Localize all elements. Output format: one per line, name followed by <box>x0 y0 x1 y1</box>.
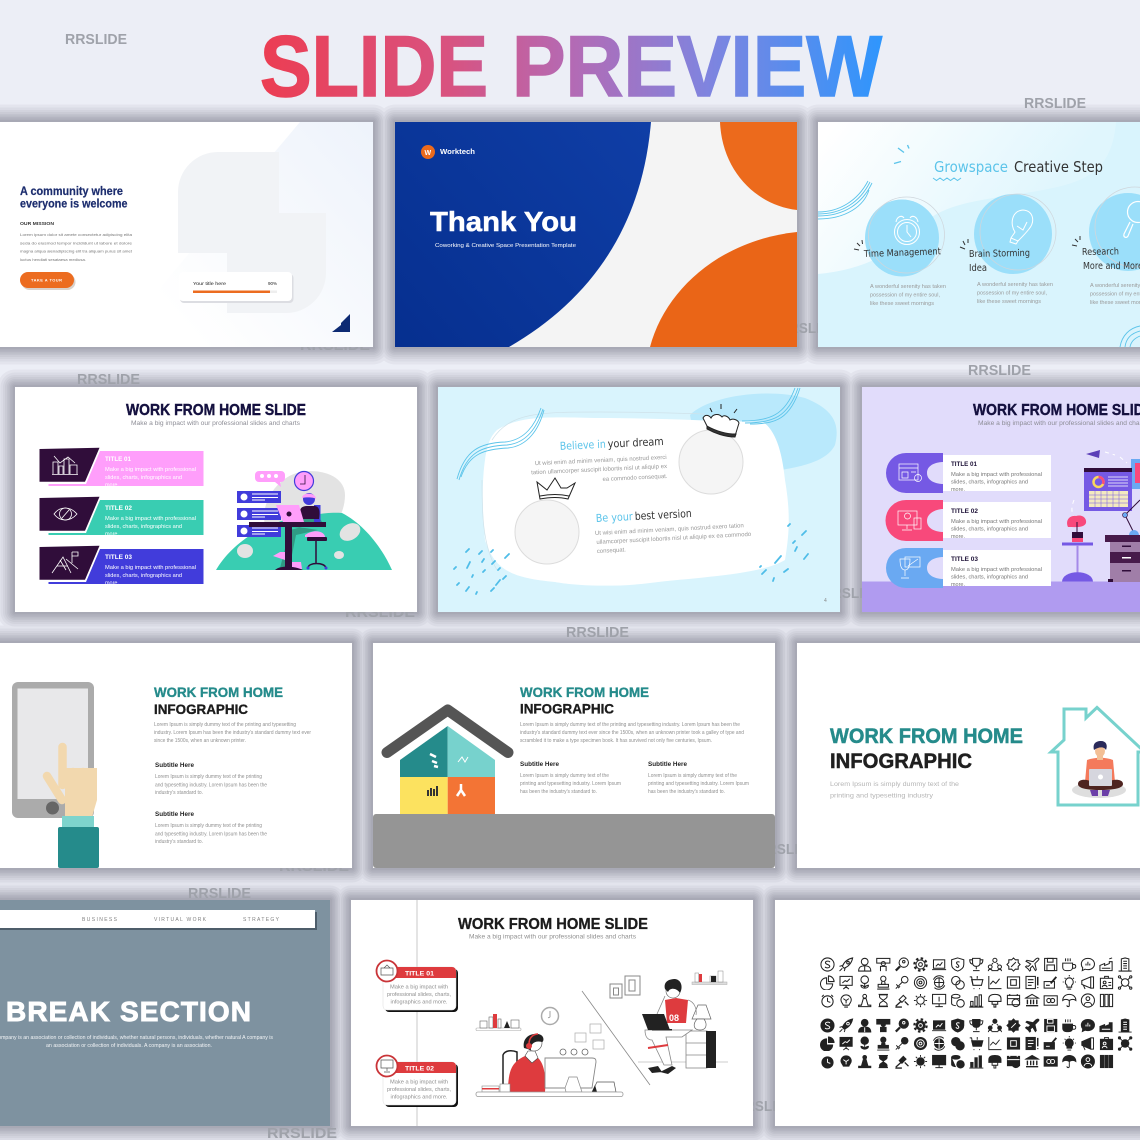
mission text: luctus hendiati sesataesa mediusa. <box>20 257 86 262</box>
watermarks: RRSLIDE <box>188 885 251 902</box>
heading: WORK FROM HOME SLIDE <box>458 916 648 933</box>
subtitle left <box>520 762 621 795</box>
crown 1 <box>703 404 739 437</box>
row 02: TITLE 02 <box>951 508 978 515</box>
subtitle block 1: industry's standard to. <box>155 790 203 796</box>
step 2: like these sweet mornings <box>977 299 1041 305</box>
thank you text: Coworking & Creative Space Presentation Template <box>435 243 576 249</box>
believe body: ea commodo consequat. <box>602 474 668 483</box>
row 01: slides, charts, infographics and <box>105 475 182 481</box>
step 1: Time Management <box>863 246 941 260</box>
row 03: Make a big impact with professional <box>951 567 1042 573</box>
card 1: infographics and more. <box>390 1000 448 1006</box>
title: PREVIEW <box>512 19 883 115</box>
subtext <box>830 781 959 800</box>
heading <box>20 186 128 210</box>
panel: tablet slide <box>0 643 352 868</box>
progress card <box>179 272 294 303</box>
row 03: TITLE 03 <box>951 556 978 563</box>
subtitle left: has been the industry's standard to. <box>520 789 597 795</box>
heading: INFOGRAPHIC <box>520 700 614 716</box>
subtitle block 2 <box>155 812 267 845</box>
mission text: magna aliqua aienadipiscing elit tra aliquam purus sit amet <box>20 248 133 254</box>
believe body: Ut wisi enim ad minim veniam, quis nostrud exerci <box>535 455 667 467</box>
card 2: Make a big impact with <box>390 1080 448 1086</box>
believe body <box>531 455 668 486</box>
crown 2 <box>537 478 575 499</box>
step 3: Research <box>1082 246 1119 258</box>
row 01: TITLE 01 <box>105 456 131 463</box>
page number: 4 <box>824 598 827 604</box>
heading <box>458 916 648 940</box>
subtitle block 2: Subtitle Here <box>155 812 195 818</box>
button <box>20 272 76 290</box>
heading <box>830 725 1023 773</box>
blue blob <box>690 393 837 474</box>
mission text: OUR MISSION <box>20 221 54 226</box>
subtitle block 1: Subtitle Here <box>155 763 195 769</box>
heading <box>520 684 649 716</box>
house with person icon <box>1051 708 1140 805</box>
row 01: Make a big impact with professional <box>951 472 1042 478</box>
nav bar: BUSINESS <box>82 917 118 923</box>
body text <box>0 1035 274 1049</box>
white blob <box>483 417 789 586</box>
heading: BREAK SECTION <box>6 996 251 1027</box>
watermarks: RRSLIDE <box>65 31 127 48</box>
row 03 <box>886 548 1051 588</box>
heading: WORK FROM HOME <box>520 684 649 700</box>
step 1: like these sweet mornings <box>870 301 934 307</box>
nav bar: VIRTUAL WORK <box>154 917 207 923</box>
subtitle block 1 <box>155 763 267 796</box>
row 03: slides, charts, infographics and <box>105 573 182 579</box>
heading: everyone is welcome <box>20 198 128 210</box>
believe text <box>559 435 664 453</box>
worktech logo <box>421 145 475 159</box>
title: SLIDE <box>260 19 488 115</box>
panel: believe slide <box>438 387 840 612</box>
divider line <box>582 991 650 1085</box>
step 1: A wonderful serenity has taken <box>870 284 946 290</box>
row 01: Make a big impact with professional <box>105 467 196 473</box>
step 2: possession of my entire soul, <box>977 290 1047 296</box>
pattern shape <box>178 152 326 313</box>
watermarks: RRSLIDE <box>300 337 370 354</box>
heading <box>934 158 1103 176</box>
row 02 <box>40 497 204 538</box>
heading: Make a big impact with our professional slides and charts <box>131 420 300 427</box>
nav bar: STRATEGY <box>243 917 280 923</box>
intro text <box>154 722 311 744</box>
photo circle 2 <box>515 500 579 564</box>
card 2: TITLE 02 <box>405 1066 434 1072</box>
orange corner bottom <box>650 232 797 347</box>
row 01: TITLE 01 <box>951 461 977 468</box>
row 02: more. <box>105 532 119 538</box>
heading: WORK FROM HOME <box>830 725 1023 748</box>
logo mark <box>332 314 350 332</box>
body text: an association or collection of individuals. A company is an association. <box>46 1043 212 1049</box>
version text: best version <box>634 507 692 523</box>
panel: infographic title slide <box>797 643 1140 868</box>
card 1: Make a big impact with <box>390 984 448 990</box>
step 1: possession of my entire soul, <box>870 292 940 298</box>
heading: Make a big impact with our professional slides and charts <box>469 934 636 940</box>
wave lines <box>457 388 800 480</box>
button: TAKE A TOUR <box>31 278 62 282</box>
panel: lilac work from home slide <box>862 387 1140 612</box>
deco swooshes <box>818 181 1140 347</box>
subtitle block 1: Lorem Ipsum is simply dummy text of the printing <box>155 774 262 780</box>
version body: ullamcorper suscipit lobortis nisl ut aliquip ex ea commodo <box>596 532 752 546</box>
watermarks: RRSLIDE <box>279 858 349 875</box>
card 1 <box>376 960 458 1012</box>
watermarks: RRSLIDE <box>735 1098 795 1115</box>
heading: Make a big impact with our professional slides and charts <box>978 420 1140 427</box>
version text: Be your <box>595 510 634 525</box>
subtitle block 2: Lorem Ipsum is simply dummy text of the printing <box>155 823 262 829</box>
mission text <box>20 221 133 262</box>
watermarks: RRSLIDE <box>779 320 839 337</box>
rain marks <box>454 524 808 594</box>
panel: icon set slide <box>775 900 1140 1126</box>
heading <box>126 402 306 427</box>
subtitle left: Subtitle Here <box>520 762 560 768</box>
intro text: Lorem Ipsum is simply dummy text of the printing and typesetting industry. Lorem Ipsum has been the <box>520 722 740 728</box>
mission text: Lorem ipsum dolor sit amete consectetur adipiscing elita <box>20 232 133 237</box>
panel: house slide <box>373 643 775 868</box>
mission text: seda do eiusmod tempor incididunt ut labore et dolore <box>20 240 133 246</box>
step 2: A wonderful serenity has taken <box>977 282 1053 288</box>
outline icons <box>820 958 1132 1007</box>
subtitle right: Subtitle Here <box>648 762 688 768</box>
card 1: TITLE 01 <box>405 970 434 978</box>
watermarks: RRSLIDE <box>968 362 1031 379</box>
orange corner top <box>720 122 797 210</box>
subtitle left: Lorem Ipsum is simply dummy text of the <box>520 773 609 779</box>
thank you text: Thank You <box>430 206 577 237</box>
subtext: Lorem Ipsum is simply dummy text of the <box>830 781 959 788</box>
watermarks: RRSLIDE <box>77 371 140 388</box>
heading: INFOGRAPHIC <box>830 750 972 773</box>
heading: Growspace <box>934 158 1008 176</box>
card 2: professional slides, charts, <box>387 1087 451 1093</box>
version body: consequat. <box>597 547 626 555</box>
subtitle right: has been the industry's standard to. <box>648 789 725 795</box>
row 02: slides, charts, infographics and <box>951 526 1028 532</box>
illustration: remote worker <box>216 471 392 570</box>
row 02: Make a big impact with professional <box>951 519 1042 525</box>
heading <box>973 402 1140 427</box>
panel: growspace slide <box>818 122 1140 347</box>
intro text: scrambled it to make a type specimen book. It has survived not only five centuries, Ipsum. <box>520 738 712 744</box>
version body: Ut wisi enim ad minim veniam, quis nostrud exero tation <box>595 523 744 537</box>
house diagram <box>387 710 508 815</box>
thank you text <box>430 206 577 249</box>
row 03: slides, charts, infographics and <box>951 574 1028 580</box>
row 01: more. <box>105 482 119 488</box>
title <box>260 19 883 115</box>
card 2: infographics and more. <box>390 1094 448 1100</box>
illustration: headset worker <box>476 1008 623 1096</box>
row 02: slides, charts, infographics and <box>105 524 182 530</box>
intro text: industry. Lorem Ipsum has been the industry's standard dummy text ever <box>154 730 311 736</box>
heading: WORK FROM HOME <box>154 684 283 700</box>
illustration: home desk <box>1062 450 1140 582</box>
subtitle right: Lorem Ipsum is simply dummy text of the <box>648 773 737 779</box>
row 03: TITLE 03 <box>105 554 132 561</box>
watermarks: RRSLIDE <box>566 624 629 641</box>
heading: INFOGRAPHIC <box>154 701 248 717</box>
progress card: 90% <box>268 281 278 287</box>
nav bar <box>0 910 317 930</box>
row 03: more. <box>105 580 119 586</box>
heading: A community where <box>20 186 123 198</box>
worktech logo: W <box>424 150 432 157</box>
believe text: your dream <box>607 435 664 451</box>
row 02: Make a big impact with professional <box>105 516 196 522</box>
intro text: industry's standard dummy text ever since the 1500s, when an unknown printer took a galley of type and <box>520 730 744 736</box>
ticks <box>894 145 909 164</box>
heading <box>154 684 283 717</box>
subtitle block 2: and typesetting industry. Lorem Ipsum has been the <box>155 832 267 838</box>
row 01 <box>886 453 1051 493</box>
row 02: TITLE 02 <box>105 505 132 512</box>
panel: thank you slide <box>395 122 797 347</box>
card 1: professional slides, charts, <box>387 992 451 998</box>
watermarks: RRSLIDE <box>822 585 882 602</box>
intro text: Lorem Ipsum is simply dummy text of the printing and typesetting <box>154 722 296 728</box>
believe body: tation ullamcorper suscipit lobortis nisl ut aliquip ex <box>531 464 667 476</box>
watermarks: RRSLIDE <box>345 604 415 621</box>
intro text: since the 1500s, when an unknown printer. <box>154 738 246 744</box>
tablet illustration <box>12 682 99 868</box>
subtitle right <box>648 762 749 795</box>
step 2 <box>960 194 1056 305</box>
step 1 <box>854 197 946 307</box>
row 01: slides, charts, infographics and <box>951 480 1028 486</box>
heading: WORK FROM HOME SLIDE <box>126 402 306 419</box>
row 02: more. <box>951 534 965 540</box>
version body <box>595 523 752 555</box>
watermarks: RRSLIDE <box>1024 95 1086 112</box>
step 3 <box>1072 187 1140 306</box>
step 2: Idea <box>969 263 987 274</box>
subtitle right: printing and typesetting industry. Lorem Ipsum <box>648 781 749 787</box>
believe text: Believe in <box>559 438 606 453</box>
step 2: Brain Storming <box>969 248 1030 260</box>
subtitle left: printing and typesetting industry. Lorem Ipsum <box>520 781 621 787</box>
subtitle block 1: and typesetting industry. Lorem Ipsum has been the <box>155 782 267 788</box>
filled icons <box>820 1019 1132 1068</box>
card 2 <box>376 1056 458 1107</box>
panel: community slide <box>0 122 373 347</box>
progress card: Your title here <box>193 281 226 287</box>
subtitle block 2: industry's standard to. <box>155 839 203 845</box>
panel: break section slide <box>0 900 330 1126</box>
row 01 <box>40 448 204 488</box>
row 03 <box>40 546 204 586</box>
illustration: laptop worker: 08 <box>669 1013 679 1023</box>
row 03: Make a big impact with professional <box>105 565 196 571</box>
version text <box>595 507 692 525</box>
illustration: laptop worker <box>610 971 728 1074</box>
row 02 <box>886 500 1051 541</box>
worktech logo: Worktech <box>440 147 475 156</box>
heading: Creative Step <box>1014 158 1103 176</box>
subtext: printing and typesetting industry <box>830 792 934 800</box>
intro text <box>520 722 744 744</box>
panel: work from home slide pink <box>15 387 417 612</box>
panel: timeline slide <box>351 900 753 1126</box>
row 01: more. <box>951 487 965 493</box>
grey base band <box>373 814 775 868</box>
photo circle 1 <box>679 430 743 494</box>
row 03: more. <box>951 582 965 588</box>
watermarks: RRSLIDE <box>757 841 817 858</box>
